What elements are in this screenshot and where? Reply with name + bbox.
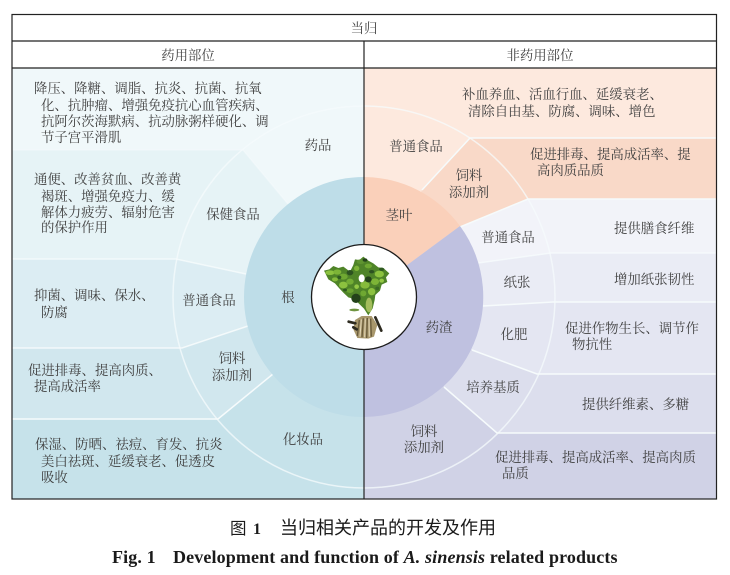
label: residue: 药渣: [426, 319, 452, 335]
central circle: [312, 244, 416, 350]
segment: root: [244, 177, 364, 417]
text: feed additive functions: 促进排毒、提高肉质、: [28, 363, 162, 378]
text: leaf food functions: 补血养血、活血行血、延缓衰老、: [462, 87, 663, 102]
text: health food functions: 褐斑、增强免疫力、缓: [41, 188, 176, 204]
label: culture substrate: 培养基质: [466, 380, 520, 395]
caption: English: Development and function of A. sinensis related products: [173, 547, 618, 567]
label: cosmetics: 化妆品: [283, 432, 323, 447]
text: common food functions: 防腐: [41, 305, 68, 320]
right outer ring labels: [389, 139, 535, 455]
sector dividing lines: [12, 106, 716, 488]
header: medicinal parts: 药用部位: [161, 48, 215, 63]
text: medicine functions: 节子宫平滑肌: [41, 129, 121, 145]
left outer ring labels: [182, 138, 331, 447]
caption: English: Fig. 1: [112, 547, 156, 567]
text: health food functions: 通便、改善贫血、改善黄: [34, 172, 181, 187]
label: common food from leaves: 普通食品: [389, 139, 443, 154]
text: dietary fibre: 提供膳食纤维: [614, 220, 694, 236]
plant foliage: [324, 257, 389, 315]
label: common food: 普通食品: [182, 293, 236, 308]
icon: angelica plant: [324, 257, 389, 339]
text: medicine functions: 化、抗肿瘤、增强免疫抗心血管疾病、: [41, 97, 269, 113]
text: leaf feed functions: 促进排毒、提高成活率、提: [530, 147, 691, 162]
caption: Chinese: 图: [230, 520, 246, 538]
caption: Chinese: 1: [253, 521, 261, 538]
header: non-medicinal parts: 非药用部位: [507, 48, 573, 63]
text: feed additive functions: 提高成活率: [34, 378, 101, 394]
text: cosmetics functions: 吸收: [41, 469, 68, 485]
plant roots: [349, 316, 381, 339]
label: feed additive from leaves: 添加剂: [449, 185, 489, 200]
label: feed additive: 添加剂: [212, 368, 252, 383]
text: medicine functions: 降压、降糖、调脂、抗炎、抗菌、抗氧: [34, 81, 262, 96]
inner ring: [244, 177, 483, 417]
label: medicine: 药品: [305, 138, 331, 153]
text: leaf feed functions: 高肉质品质: [537, 162, 604, 178]
label: feed additive from leaves: 饲料: [456, 168, 482, 183]
caption: Chinese: 当归相关产品的开发及作用: [280, 518, 496, 538]
label: feed additive from residue: 饲料: [411, 424, 437, 439]
inner ring labels: [281, 208, 452, 335]
text: fertilizer functions: 物抗性: [572, 336, 613, 352]
text: cosmetics functions: 保湿、防晒、祛痘、育发、抗炎: [35, 437, 222, 452]
label: common food from residue: 普通食品: [481, 230, 535, 245]
text: cosmetics functions: 美白祛斑、延缓衰老、促透皮: [41, 453, 215, 469]
label: root: 根: [281, 289, 295, 305]
text: common food functions: 抑菌、调味、保水、: [34, 288, 155, 303]
label: feed additive from residue: 添加剂: [404, 440, 444, 455]
text: health food functions: 的保护作用: [41, 219, 108, 235]
text: residue feed functions: 促进排毒、提高成活率、提高肉质: [495, 450, 696, 465]
label: fertilizer: 化肥: [501, 327, 527, 342]
segment: residue: [364, 226, 483, 417]
label: paper: 纸张: [504, 275, 530, 290]
panel: non-medicinal parts background sectors: [364, 68, 716, 499]
segment: stems and leaves: [364, 177, 460, 297]
text: residue feed functions: 品质: [502, 466, 529, 481]
text: medicine functions: 抗阿尔茨海默病、抗动脉粥样硬化、调: [41, 113, 269, 129]
text: health food functions: 解体力疲劳、辐射危害: [41, 204, 175, 220]
label: health food: 保健食品: [206, 206, 260, 222]
panel: medicinal parts background sectors: [12, 68, 364, 499]
label: stems and leaves: 茎叶: [386, 208, 413, 223]
text: fertilizer functions: 促进作物生长、调节作: [565, 321, 699, 336]
label: feed additive: 饲料: [219, 351, 245, 366]
text: leaf food functions: 清除自由基、防腐、调味、增色: [468, 104, 655, 119]
header: Angelica: 当归: [351, 20, 377, 36]
text: substrate functions: 提供纤维素、多糖: [582, 396, 689, 412]
text: paper toughness: 增加纸张韧性: [614, 271, 695, 287]
